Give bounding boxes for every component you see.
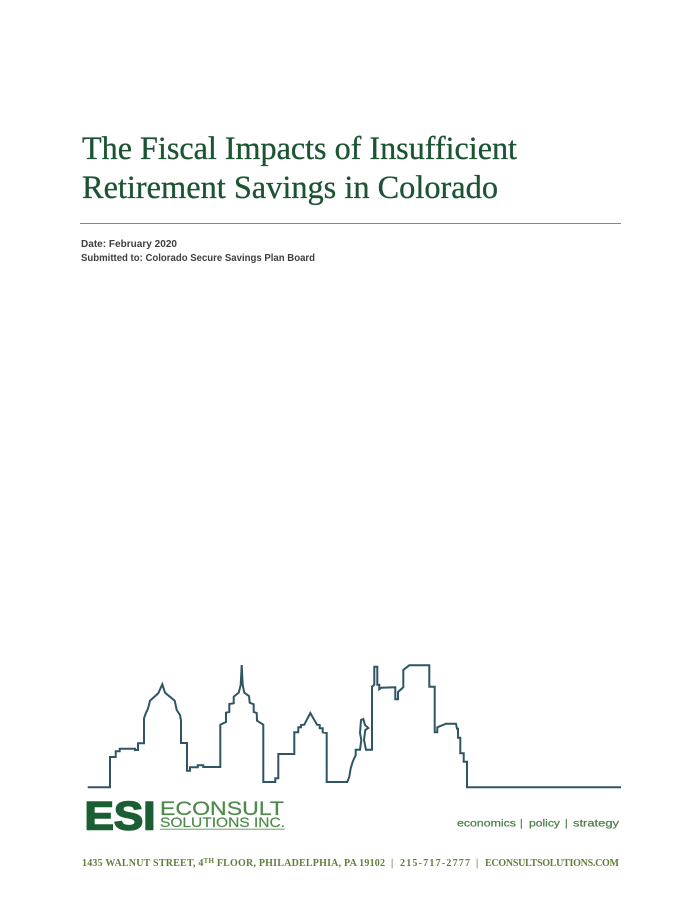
company logo <box>84 794 285 838</box>
footer contact line: 215-717-2777 <box>400 858 470 869</box>
footer contact line <box>82 857 620 869</box>
title: Retirement Savings in Colorado <box>82 170 498 206</box>
footer contact line: TH <box>204 857 215 865</box>
footer contact line: | <box>391 858 393 869</box>
date and submission details <box>81 238 315 264</box>
tagline: policy <box>529 818 561 830</box>
footer contact line: ECONSULTSOLUTIONS.COM <box>485 858 620 869</box>
date and submission details: Submitted to: Colorado Secure Savings Plan Board <box>81 252 315 264</box>
tagline <box>457 818 620 830</box>
tagline: | <box>565 818 568 830</box>
city skyline illustration <box>88 665 621 787</box>
tagline: strategy <box>573 818 620 830</box>
footer contact line: FLOOR, PHILADELPHIA, PA 19102 <box>214 858 385 869</box>
title: The Fiscal Impacts of Insufficient <box>82 131 517 167</box>
title <box>82 131 517 206</box>
company logo: SOLUTIONS INC. <box>160 814 285 830</box>
tagline: | <box>520 818 523 830</box>
logo company name: ECONSULT <box>160 798 284 820</box>
footer contact line: | <box>476 858 478 869</box>
date and submission details: Date: February 2020 <box>81 238 177 250</box>
tagline: economics <box>457 818 516 830</box>
footer contact line: 1435 WALNUT STREET, 4 <box>82 858 203 869</box>
logo initials: ESI <box>84 794 156 838</box>
